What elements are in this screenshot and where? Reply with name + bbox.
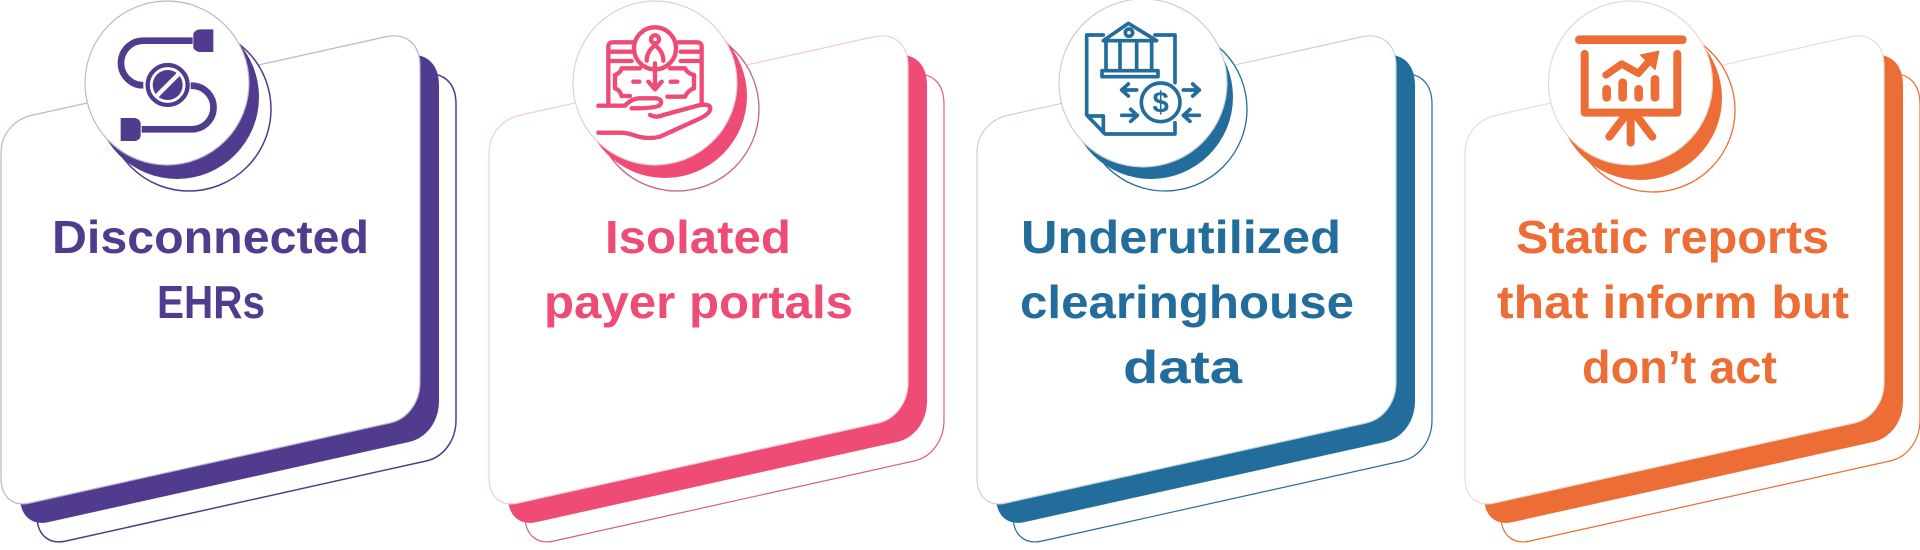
panel: Static reports (1465, 1, 1920, 542)
panel: Isolated payer portals (489, 1, 944, 542)
heading: Disconnected (52, 211, 369, 263)
heading: data (1123, 341, 1243, 393)
heading: payer portals (544, 276, 853, 328)
heading: don’t act (1582, 341, 1777, 393)
icon: disconnected cable (121, 29, 213, 141)
icon: money in hand (598, 27, 710, 138)
heading: Isolated (605, 211, 791, 263)
panel: Underutilized clearinghouse data (977, 0, 1432, 542)
heading: Underutilized (1021, 211, 1341, 263)
heading: EHRs (157, 276, 265, 328)
panel: Disconnected EHRs (1, 1, 456, 542)
heading (1497, 211, 1849, 393)
heading: that inform but (1497, 276, 1849, 328)
icon: bank document and dollar (1087, 23, 1199, 134)
heading: Static reports (1516, 211, 1829, 263)
icon: presentation board with chart (1579, 40, 1682, 143)
heading: clearinghouse (1020, 276, 1354, 328)
heading (544, 211, 853, 328)
heading (52, 211, 369, 328)
heading (1020, 211, 1354, 393)
icon: bank document and dollar: $ (1153, 87, 1169, 120)
